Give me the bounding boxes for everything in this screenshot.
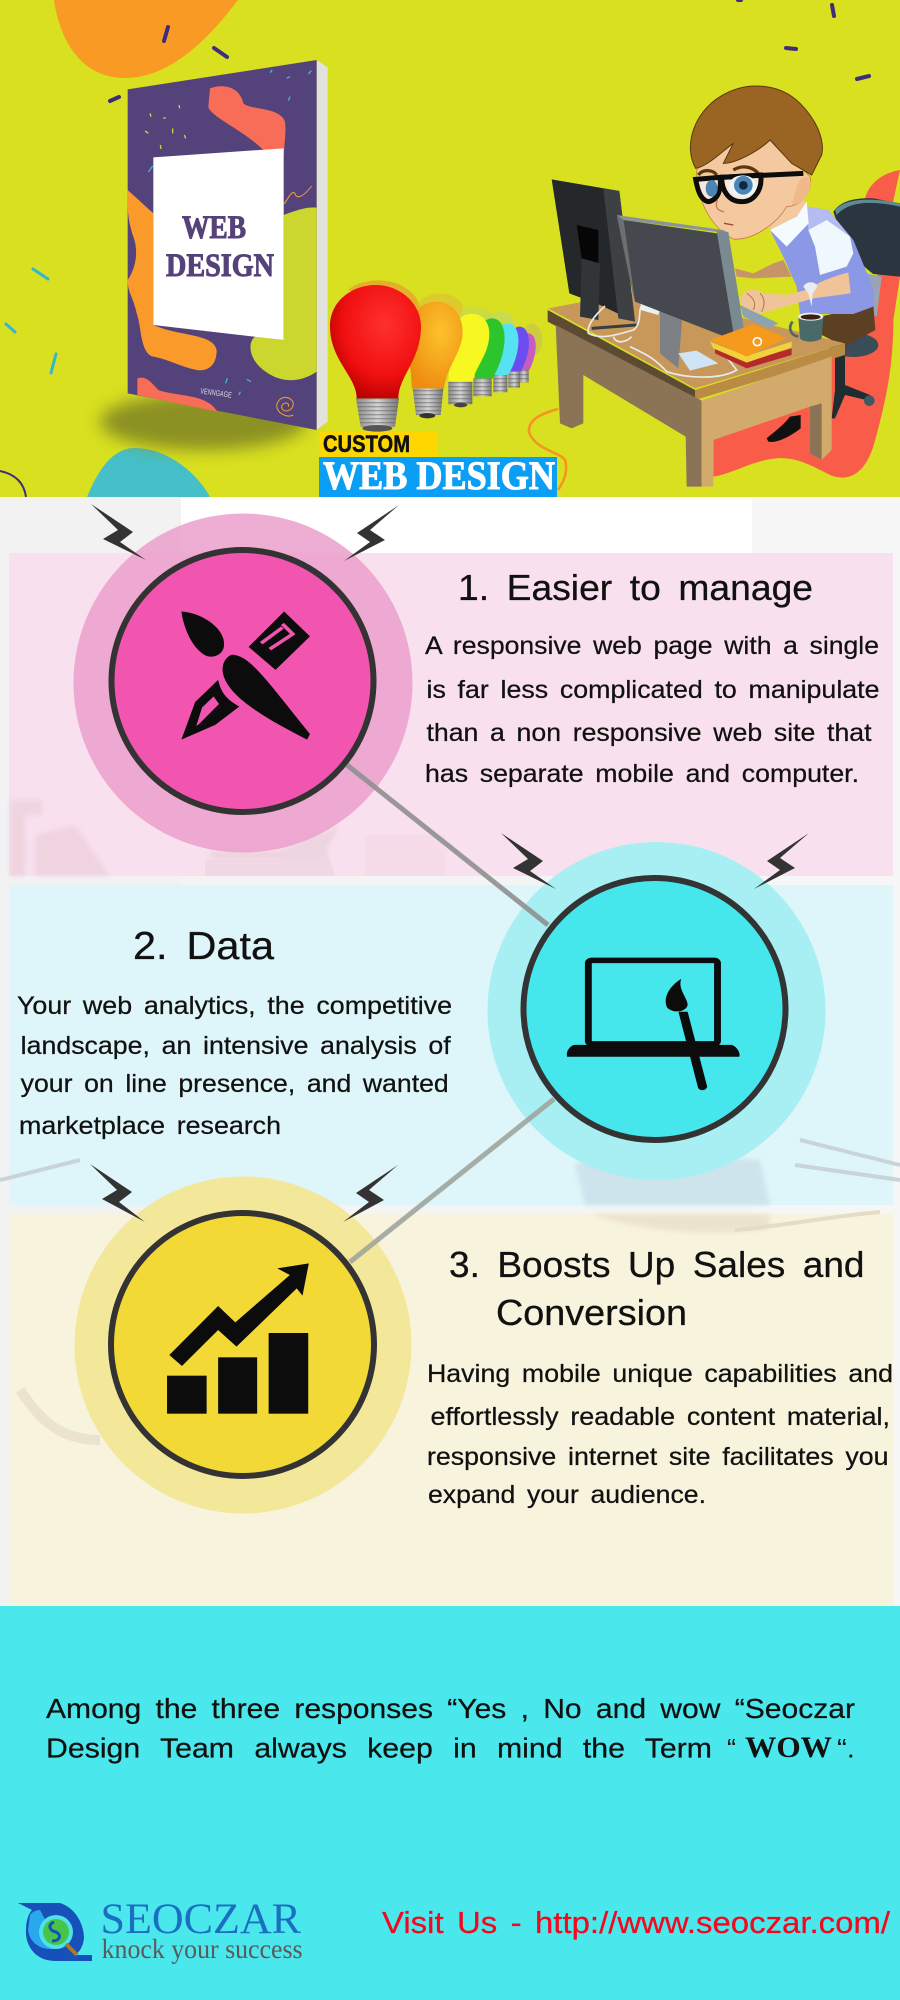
yellow bulb xyxy=(448,314,489,407)
mouth xyxy=(724,223,733,225)
keyboard xyxy=(740,305,778,328)
hair xyxy=(690,86,822,175)
books xyxy=(710,324,792,368)
red backdrop blob xyxy=(713,170,900,478)
glasses xyxy=(696,173,803,202)
step 2 text: marketplace research xyxy=(19,1112,281,1140)
label: custom: CUSTOM xyxy=(323,431,410,458)
icon: brush and pen xyxy=(181,612,310,740)
face xyxy=(697,137,811,239)
step 2 badge xyxy=(488,833,826,1180)
step 2 text xyxy=(17,992,452,1140)
step 2 text: your on line presence, and wanted xyxy=(21,1070,449,1098)
step 3 text: effortlessly readable content material, xyxy=(430,1403,890,1431)
custom web design label xyxy=(319,431,557,498)
red bulb xyxy=(330,285,421,432)
step 1 badge xyxy=(74,504,412,852)
book title xyxy=(166,210,274,284)
step 1 text: than a non responsive web site that xyxy=(426,719,872,747)
book spiral xyxy=(277,397,293,416)
confetti dashes xyxy=(6,0,869,373)
book publisher: VENNGAGE xyxy=(200,386,232,400)
icon: rising bar chart xyxy=(167,1263,309,1414)
book title: DESIGN xyxy=(166,248,274,284)
step 3 text xyxy=(427,1360,893,1509)
step 1 text: has separate mobile and computer. xyxy=(425,760,859,788)
cables xyxy=(588,305,737,377)
cyan bulb xyxy=(493,323,518,392)
nose xyxy=(716,200,724,212)
step 2 text: Your web analytics, the competitive xyxy=(17,992,452,1020)
logo: seoczar xyxy=(18,1896,303,1964)
book white card xyxy=(153,148,284,340)
desk xyxy=(548,292,845,487)
orange bulb xyxy=(407,302,463,418)
lightning bolt right xyxy=(343,1165,398,1222)
lightning bolt right xyxy=(344,505,399,561)
connector: step 2 to step 3 xyxy=(350,1099,554,1262)
closing statement: “. xyxy=(837,1734,855,1764)
orange blob top xyxy=(54,0,238,78)
step 3 heading: 3. Boosts Up Sales and xyxy=(449,1244,864,1285)
panel: blue xyxy=(0,885,900,1205)
connector: step 1 to step 2 xyxy=(347,765,548,925)
far arm xyxy=(735,260,792,278)
lightning bolt right xyxy=(754,833,809,889)
teal blob bottom xyxy=(87,448,210,497)
label: web design: WEB DESIGN xyxy=(323,453,555,498)
blue bulb xyxy=(508,327,529,388)
panel: pink xyxy=(9,553,893,876)
faint office photo background xyxy=(0,497,900,1607)
closing statement xyxy=(46,1693,855,1764)
logo wordmark: SEOCZAR xyxy=(100,1896,301,1943)
lightning bolt left xyxy=(90,1164,145,1222)
step 3 heading xyxy=(449,1244,864,1333)
step 3 text: expand your audience. xyxy=(428,1481,706,1509)
logo tagline: knock your success xyxy=(102,1934,303,1964)
step 1 text: is far less complicated to manipulate xyxy=(426,676,880,704)
closing statement: Design Team always keep in mind the Term xyxy=(46,1732,712,1764)
step 1 text xyxy=(425,632,880,788)
front monitor xyxy=(617,215,745,371)
neck xyxy=(767,200,807,230)
collar xyxy=(770,202,809,247)
orange cable xyxy=(529,409,566,490)
coffee mug xyxy=(790,313,823,342)
purple bulb xyxy=(519,333,536,382)
hero banner xyxy=(0,0,900,498)
rear monitor xyxy=(552,179,637,328)
near arm xyxy=(740,272,851,314)
vest xyxy=(770,207,874,314)
step 3 badge xyxy=(74,1164,412,1514)
logo mark xyxy=(18,1903,92,1961)
shoe xyxy=(767,415,801,442)
book title: WEB xyxy=(182,210,246,246)
book xyxy=(100,60,328,450)
step 2 text: landscape, an intensive analysis of xyxy=(21,1032,451,1060)
lightning bolt left xyxy=(501,833,556,889)
eyebrows xyxy=(698,167,758,175)
step 2 heading: 2. Data xyxy=(133,925,274,968)
light bulbs xyxy=(330,280,542,432)
trousers xyxy=(820,305,875,347)
icon: laptop with brush xyxy=(567,960,740,1090)
closing statement: Among the three responses “Yes , No and wow “Seoczar xyxy=(46,1693,855,1724)
website link: Visit Us - http://www.seoczar.com/ xyxy=(382,1905,890,1940)
closing statement: “ xyxy=(727,1734,736,1764)
step 3 text: responsive internet site facilitates you xyxy=(427,1443,888,1471)
power plugs xyxy=(641,303,660,315)
ear xyxy=(792,177,811,205)
sleeve xyxy=(808,220,853,275)
step 3 text: Having mobile unique capabilities and xyxy=(427,1360,893,1388)
step 1 heading: 1. Easier to manage xyxy=(458,567,813,608)
closing statement: WOW xyxy=(745,1731,832,1764)
step 3 heading: Conversion xyxy=(496,1292,687,1333)
lightning bolt left xyxy=(91,504,146,560)
designer at desk xyxy=(548,86,900,487)
chair xyxy=(828,198,900,418)
footer panel xyxy=(0,1606,900,2000)
panel: cream xyxy=(9,1212,893,1606)
green bulb xyxy=(473,318,505,396)
step 1 text: A responsive web page with a single xyxy=(425,632,879,660)
purple arc xyxy=(0,471,26,497)
